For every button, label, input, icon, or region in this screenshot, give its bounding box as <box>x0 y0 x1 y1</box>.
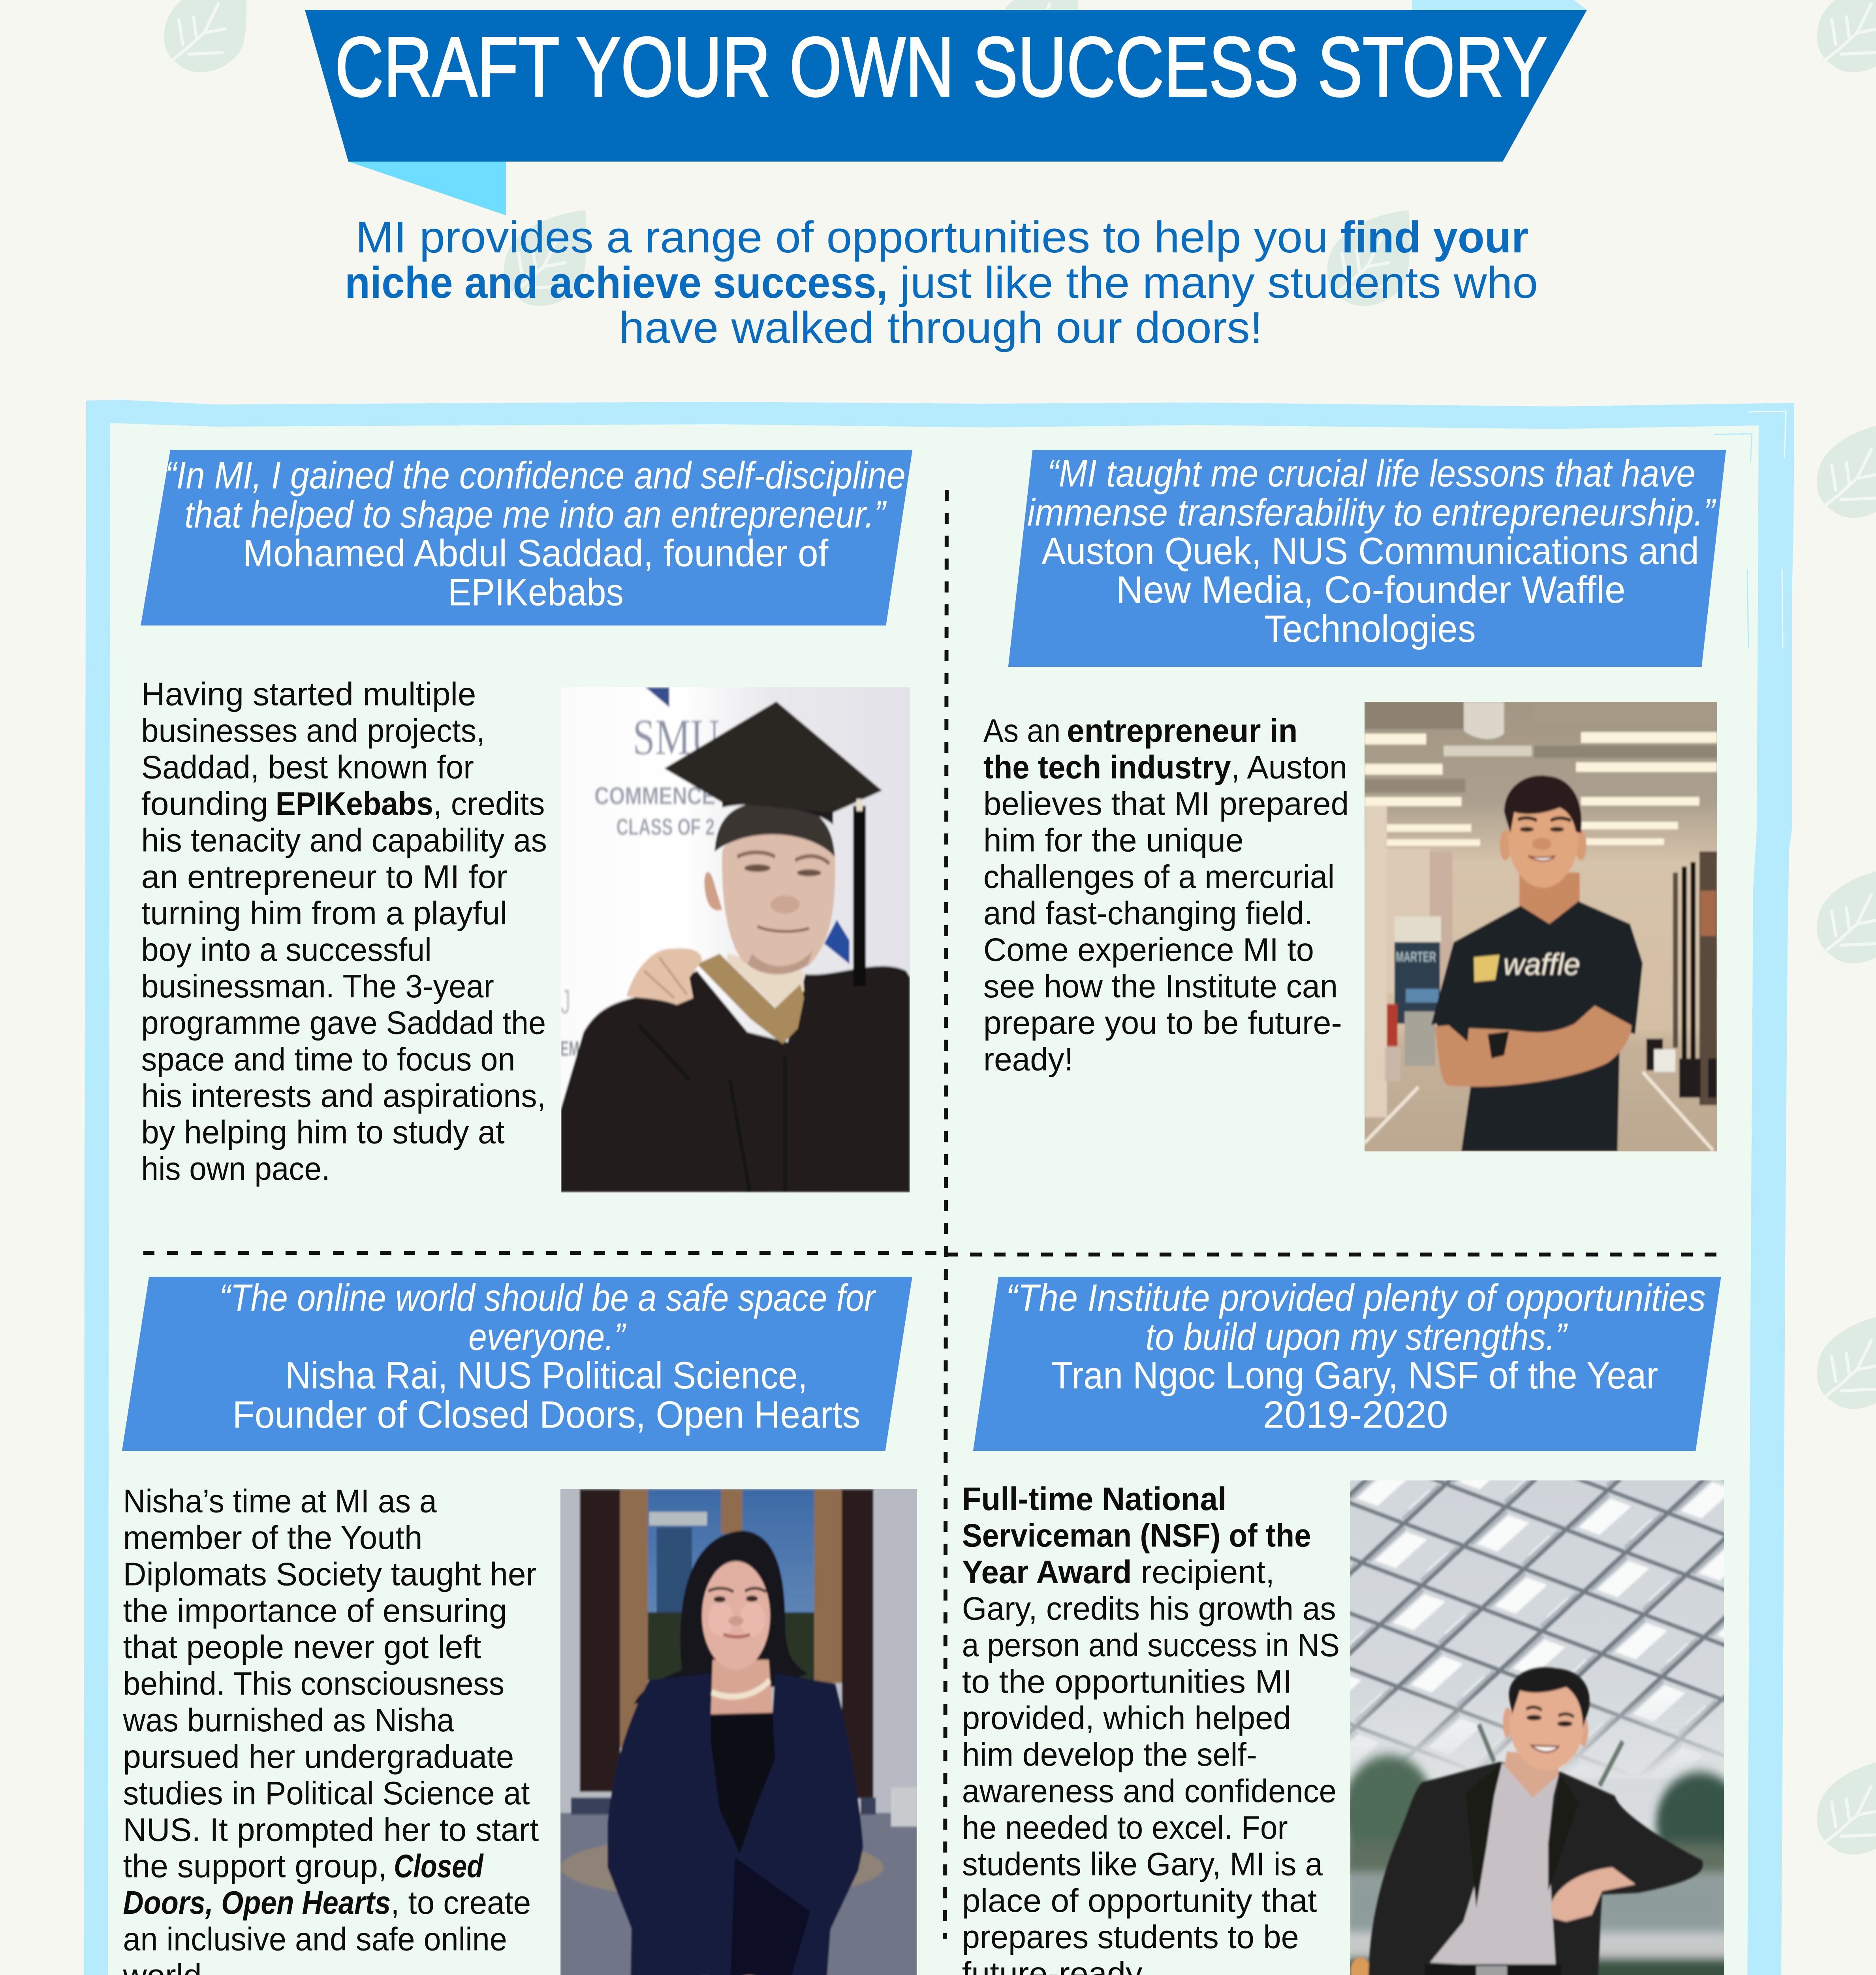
body text: Nisha: studies in Political Science at <box>123 1775 530 1811</box>
body text: Gary: recipient, <box>1141 1554 1274 1590</box>
quote banner: Saddad: Mohamed Abdul Saddad, founder of <box>243 532 829 574</box>
body text: Gary: awareness and confidence <box>962 1773 1337 1809</box>
body text: Auston: believes that MI prepared <box>983 785 1349 822</box>
panel: Auston <box>983 450 1726 1153</box>
intro text <box>345 213 1538 352</box>
photo: Saddad in graduation gown: EM <box>560 1036 579 1060</box>
body text: Nisha: pursued her undergraduate <box>123 1738 514 1775</box>
body text: Nisha: the importance of ensuring <box>123 1592 507 1629</box>
photo: Saddad in graduation gown: J <box>560 983 570 1021</box>
photo: Auston in waffle t-shirt <box>1363 700 1718 1153</box>
body text: Saddad: EPIKebabs <box>276 785 433 822</box>
body text: Gary: to the opportunities MI <box>962 1663 1292 1700</box>
body text: Nisha: that people never got left <box>123 1629 481 1665</box>
body text: Gary: Year Award <box>962 1554 1132 1590</box>
body text: Auston: prepare you to be future- <box>983 1004 1342 1041</box>
intro text: find your <box>1340 213 1528 262</box>
body text: Gary: he needed to excel. For <box>962 1809 1288 1846</box>
body text: Nisha <box>123 1483 539 1975</box>
photo: Saddad in graduation gown: CLASS OF 2 <box>617 814 714 840</box>
body text: Nisha: Doors, Open Hearts <box>123 1884 391 1921</box>
quote banner: Nisha: everyone.” <box>468 1316 626 1358</box>
body text: Saddad: his own pace. <box>141 1150 330 1187</box>
body text: Auston: ready! <box>983 1041 1073 1078</box>
quote banner: Saddad <box>141 450 912 625</box>
body text: Gary: him develop the self- <box>962 1736 1257 1773</box>
quote banner: Nisha: “The online world should be a safe space for <box>219 1277 876 1319</box>
body text: Nisha: Diplomats Society taught her <box>123 1556 537 1592</box>
quote banner: Saddad: EPIKebabs <box>448 572 624 614</box>
body text: Auston: see how the Institute can <box>983 968 1338 1004</box>
quote banner: Auston <box>1008 450 1726 667</box>
body text: Gary: place of opportunity that <box>962 1882 1317 1919</box>
body text: Saddad: an entrepreneur to MI for <box>141 858 507 895</box>
quote banner: Nisha: Nisha Rai, NUS Political Science, <box>286 1354 808 1397</box>
quote banner: Nisha: Founder of Closed Doors, Open Hearts <box>233 1394 861 1436</box>
body text: Saddad: Having started multiple <box>141 676 476 713</box>
body text: Saddad: space and time to focus on <box>141 1041 515 1078</box>
body text: Nisha: an inclusive and safe online <box>123 1921 507 1958</box>
title: CRAFT YOUR OWN SUCCESS STORY <box>335 20 1547 114</box>
photo: Gary in black suit <box>1343 1478 1743 1975</box>
dashed dividers <box>143 490 1722 1939</box>
body text: Gary: prepares students to be <box>962 1919 1299 1955</box>
quote banner: Auston: Auston Quek, NUS Communications and <box>1041 530 1699 572</box>
body text: Nisha: Nisha’s time at MI as a <box>123 1483 437 1520</box>
body text: Nisha: was burnished as Nisha <box>123 1702 455 1738</box>
body text: Auston: challenges of a mercurial <box>983 858 1335 895</box>
body text: Saddad: , credits <box>433 785 545 822</box>
photo: Saddad in graduation gown <box>558 685 911 1195</box>
intro text: have walked through our doors! <box>619 303 1263 352</box>
body text: Auston <box>983 712 1349 1078</box>
photo: Auston in waffle t-shirt: waffle <box>1503 947 1580 981</box>
photo: Auston in waffle t-shirt: MARTER <box>1396 949 1436 965</box>
panel: Saddad <box>141 450 912 1195</box>
intro text: just like the many students who <box>899 258 1538 307</box>
body text: Saddad: businesses and projects, <box>141 712 485 749</box>
quote banner: Auston: Technologies <box>1264 608 1476 650</box>
panel: Nisha <box>122 1277 919 1975</box>
panel: Gary <box>962 1277 1743 1975</box>
body text: Auston: entrepreneur in <box>1067 712 1297 749</box>
body text: Saddad: turning him from a playful <box>141 895 507 931</box>
body text: Saddad: Saddad, best known for <box>141 749 474 786</box>
body text: Nisha: NUS. It prompted her to start <box>123 1811 539 1848</box>
quote banner: Gary: 2019-2020 <box>1263 1394 1448 1436</box>
body text: Auston: Come experience MI to <box>983 931 1314 968</box>
body text: Saddad: programme gave Saddad the <box>141 1004 546 1041</box>
body text: Saddad: his interests and aspirations, <box>141 1077 546 1114</box>
body text: Nisha: behind. This consciousness <box>123 1665 504 1702</box>
quote banner: Gary: Tran Ngoc Long Gary, NSF of the Year <box>1051 1354 1658 1397</box>
brush frame <box>84 400 1794 1975</box>
quote banner: Gary: to build upon my strengths.” <box>1145 1316 1568 1358</box>
body text: Nisha: the support group, <box>123 1848 387 1885</box>
quote banner: Gary: “The Institute provided plenty of opportunities <box>1006 1277 1706 1319</box>
body text: Saddad: his tenacity and capability as <box>141 822 547 858</box>
quote banner: Auston: “MI taught me crucial life lessons that have <box>1047 452 1696 495</box>
intro text: niche and achieve success, <box>345 258 888 307</box>
body text: Gary: a person and success in NS <box>962 1627 1340 1663</box>
body text: Auston: and fast-changing field. <box>983 895 1313 931</box>
quote banner: Auston: New Media, Co-founder Waffle <box>1116 569 1626 611</box>
body text: Gary: provided, which helped <box>962 1700 1291 1736</box>
body text: Auston: the tech industry <box>983 749 1231 786</box>
body text: Gary: students like Gary, MI is a <box>962 1845 1323 1882</box>
body text: Nisha: member of the Youth <box>123 1519 423 1556</box>
body text: Saddad: by helping him to study at <box>141 1114 505 1151</box>
photo: Saddad in graduation gown: COMMENCE <box>594 782 715 809</box>
body text: Gary <box>962 1480 1340 1975</box>
body text: Nisha: Closed <box>394 1848 484 1885</box>
quote banner: Nisha <box>122 1277 912 1451</box>
body text: Auston: As an <box>983 712 1060 749</box>
quote banner: Gary <box>973 1277 1721 1451</box>
intro text: MI provides a range of opportunities to help you <box>355 213 1328 262</box>
body text: Saddad <box>141 676 547 1187</box>
photo: Nisha in navy blazer <box>558 1486 919 1975</box>
body text: Gary: Gary, credits his growth as <box>962 1590 1336 1627</box>
body text: Auston: , Auston <box>1231 749 1347 786</box>
photo background: trees and railing <box>1343 1755 1743 1975</box>
title banner <box>305 0 1587 215</box>
body text: Auston: him for the unique <box>983 822 1244 858</box>
quote banner: Auston: immense transferability to entrepreneurship.” <box>1027 491 1716 534</box>
quote banner: Saddad: “In MI, I gained the confidence and self-discipline <box>165 455 906 497</box>
body text: Saddad: businessman. The 3-year <box>141 968 494 1004</box>
body text: Gary: Full-time National <box>962 1480 1226 1517</box>
photo: Saddad in graduation gown: SMU <box>633 709 720 766</box>
body text: Gary: Serviceman (NSF) of the <box>962 1517 1311 1554</box>
body text: Nisha: , to create <box>391 1884 531 1921</box>
body text: Saddad: founding <box>141 785 268 822</box>
body text: Saddad: boy into a successful <box>141 931 432 968</box>
quote banner: Saddad: that helped to shape me into an entrepreneur.” <box>184 494 887 536</box>
